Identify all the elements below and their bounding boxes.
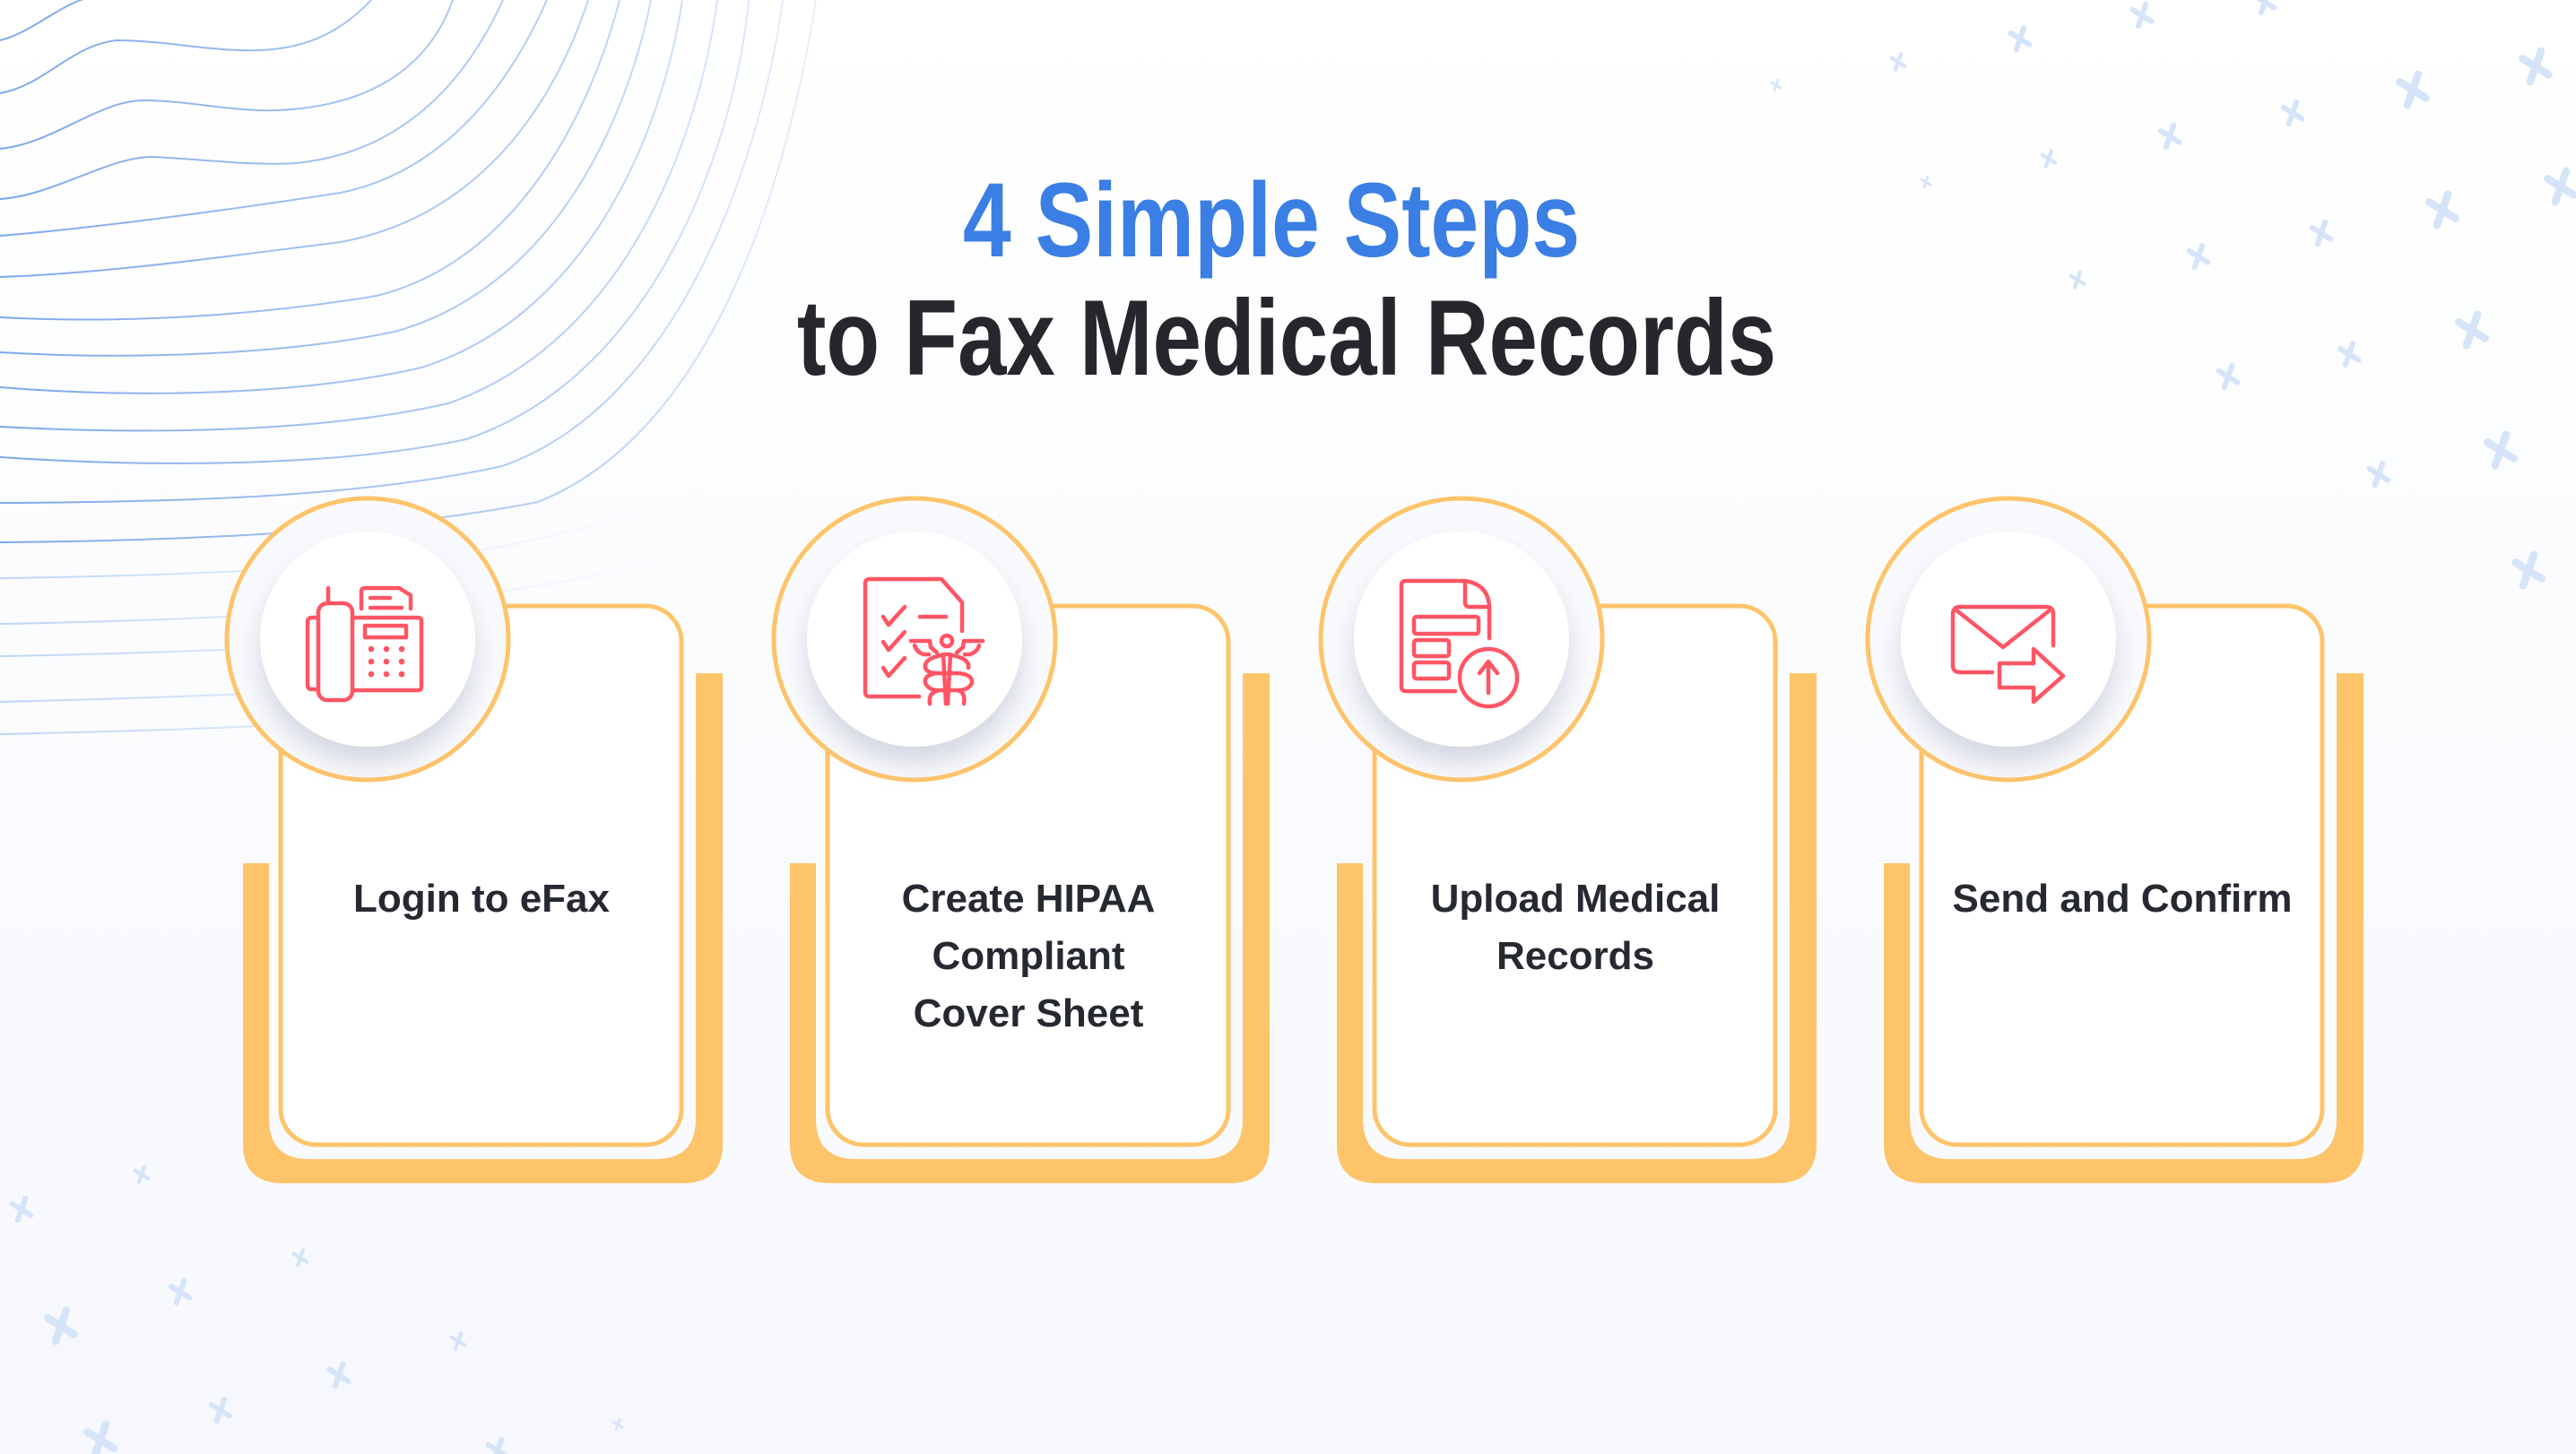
- text: Create HIPAA Compliant Cover Sheet: Create HIPAA: [902, 877, 1155, 921]
- decorative contour lines: [0, 0, 816, 734]
- text: Upload Medical Records: Upload Medical: [1431, 877, 1720, 921]
- text: Send and Confirm: Send and Confirm: [1953, 877, 2292, 921]
- panel: step 3 upload: [1321, 498, 1817, 1183]
- text: Create HIPAA Compliant Cover Sheet: Cover Sheet: [914, 991, 1144, 1035]
- title: to Fax Medical Records: [797, 279, 1776, 398]
- text: Upload Medical Records: Records: [1496, 934, 1654, 978]
- title: 4 Simple Steps: [963, 160, 1580, 279]
- text: Create HIPAA Compliant Cover Sheet: Compliant: [932, 934, 1125, 978]
- text: Login to eFax: Login to eFax: [353, 877, 611, 921]
- panel: step 2 cover sheet: [774, 498, 1270, 1183]
- icon: document upload: [1401, 581, 1517, 706]
- icon: fax machine: [308, 588, 421, 700]
- panel: step 4 send: [1868, 498, 2364, 1183]
- icon: envelope with arrow: [1953, 607, 2063, 702]
- title: [797, 160, 1776, 398]
- icon: checklist with caduceus: [865, 579, 983, 704]
- panel: step 1 login: [227, 498, 723, 1183]
